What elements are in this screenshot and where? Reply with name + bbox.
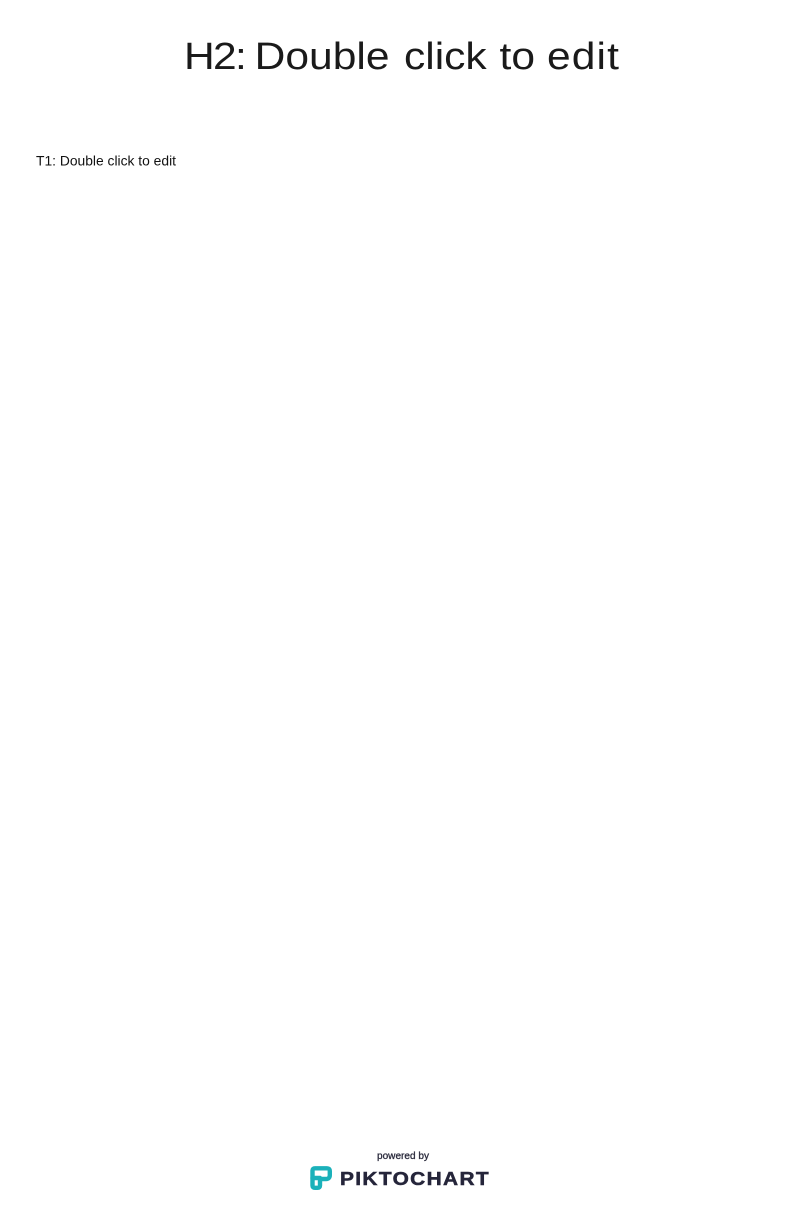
title: click [404, 34, 499, 77]
icon: Piktochart P mark [312, 1168, 330, 1188]
title: to [500, 34, 547, 77]
body text: T1: Double click to edit [36, 152, 176, 168]
title: Double [255, 34, 401, 77]
footer: powered by Piktochart logo [312, 1151, 490, 1189]
title: edit [547, 34, 620, 77]
wordmark: PIKTOCHART [340, 1168, 490, 1189]
title: H2: [184, 34, 255, 77]
powered by label: powered by [377, 1151, 429, 1162]
